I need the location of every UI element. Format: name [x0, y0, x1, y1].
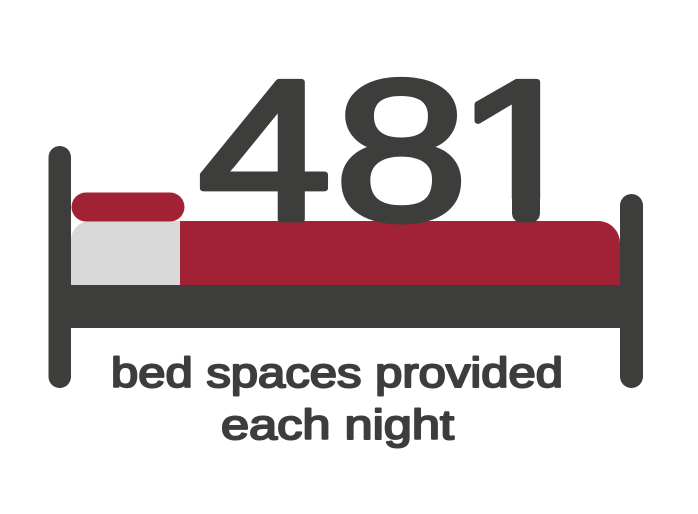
bed right post [620, 194, 643, 388]
bed left post [48, 146, 71, 388]
number: 481: 481 [198, 38, 589, 262]
caption line 2: each night [221, 401, 454, 448]
pillow [72, 192, 184, 222]
bed base [60, 285, 630, 328]
infographic: bed statistic [48, 76, 643, 448]
pillow case [71, 221, 180, 285]
icon: bed [48, 146, 643, 388]
caption [111, 349, 563, 448]
mattress sheet [180, 221, 620, 285]
caption line 1: bed spaces provided [111, 349, 563, 396]
